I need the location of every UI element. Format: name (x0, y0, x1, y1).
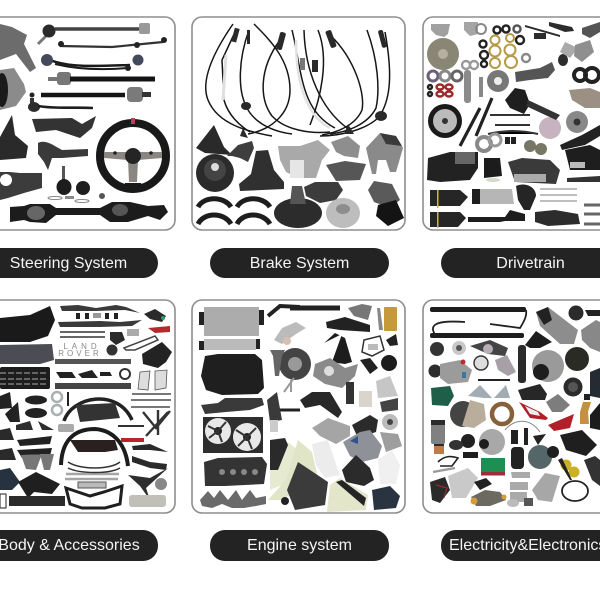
gray box (546, 394, 570, 412)
relay block (380, 398, 398, 412)
small lower parts (507, 499, 519, 507)
arms and rods (488, 115, 538, 134)
pulleys row (430, 340, 508, 356)
tailgate struts (430, 307, 526, 338)
air suspension compressor left (427, 152, 478, 182)
steering rack top (515, 62, 555, 82)
clip row (56, 370, 112, 378)
label: brake system (210, 248, 389, 278)
yellow parts (560, 460, 572, 470)
bumper lower (0, 344, 54, 364)
small gear bottom (281, 497, 289, 505)
ignition black parts (322, 333, 352, 364)
shaft pieces (464, 70, 471, 103)
sender gold (580, 402, 591, 424)
label: steering system: Steering System (10, 255, 127, 272)
cable fittings (231, 28, 387, 138)
coil pack (511, 428, 528, 445)
engine mount (376, 376, 398, 398)
engine guard (0, 468, 20, 490)
red reflector (121, 438, 144, 442)
exhaust arms (284, 378, 294, 392)
rings (52, 392, 62, 402)
radiator (199, 307, 264, 350)
label: engine system (210, 530, 389, 561)
fuse box (518, 384, 547, 400)
yokes and rings top left (431, 22, 520, 37)
steering parts collage (0, 23, 168, 223)
bearing pair (477, 137, 491, 151)
expansion tank black (270, 438, 288, 470)
cluster gauge (564, 378, 582, 396)
blue master cylinder (343, 430, 382, 462)
gear (487, 70, 509, 92)
brake valve block (227, 141, 254, 162)
armature (431, 420, 445, 454)
headlight (129, 495, 166, 507)
hub bearing (539, 117, 561, 139)
brake shoes (198, 199, 270, 224)
AC compressor clutch (450, 400, 486, 428)
silver evap cores (510, 472, 530, 502)
crankshaft (200, 490, 266, 508)
black module right (590, 403, 600, 430)
land rover lettering (58, 342, 102, 358)
oil pan (569, 88, 600, 108)
silver trims (65, 474, 119, 479)
lamp housings (138, 370, 167, 390)
red tail lights (519, 402, 548, 420)
clutch disc (427, 38, 459, 70)
front grille (0, 367, 50, 389)
label: drivetrain: Drivetrain (496, 255, 565, 272)
label: engine system: Engine system (247, 537, 352, 554)
ball joints (48, 166, 105, 202)
air spring (484, 158, 502, 178)
label: steering system (0, 248, 158, 278)
label: body & accessories (0, 530, 158, 561)
brake cables (206, 24, 390, 136)
bearings rows (428, 36, 530, 96)
strut bottom (535, 210, 580, 226)
wheel arch upper (64, 399, 132, 421)
panel: engine system (192, 300, 405, 513)
brackets (21, 454, 54, 470)
window switch (518, 345, 526, 383)
X brackets (143, 410, 170, 436)
starter drive (528, 445, 552, 469)
ABS wire (562, 481, 588, 501)
air compressor right (508, 158, 560, 184)
brake caliper silver (278, 140, 330, 178)
CV axles (460, 98, 492, 146)
ecu board green (431, 386, 454, 406)
land rover lettering: ROVER (58, 349, 102, 358)
electrical parts collage (428, 306, 600, 507)
steering wheel (100, 118, 166, 190)
rubber shifter boot (196, 125, 232, 155)
solenoid black (511, 447, 524, 469)
pump lower left (430, 477, 450, 503)
module right (565, 145, 600, 170)
steering housing (0, 172, 42, 200)
sensor and bracket (474, 356, 488, 370)
label: drivetrain (441, 248, 600, 278)
sensor coil (362, 336, 384, 356)
small spoilers (16, 421, 54, 430)
intake manifold (201, 398, 264, 414)
black bracket (18, 472, 60, 498)
panel: electricity & electronics (423, 300, 600, 513)
clutch plate (566, 111, 588, 133)
spark plug (377, 308, 383, 330)
dark motor (565, 347, 589, 371)
control arm right (128, 468, 168, 500)
long hoses (290, 306, 340, 310)
timing cover (312, 418, 350, 444)
roof rails top (58, 305, 142, 327)
cylinder head (204, 457, 267, 486)
mirror caps (25, 396, 47, 404)
panel: steering system (0, 17, 175, 230)
steering shaft (10, 202, 168, 223)
bearing ring gold (492, 404, 512, 424)
trim strips right (131, 394, 171, 407)
tie rods (28, 23, 167, 112)
bottom reservoirs (287, 462, 328, 510)
top right small parts (106, 309, 172, 368)
transmission oil pan (201, 354, 264, 395)
small module (380, 432, 402, 452)
brake pads (326, 161, 366, 181)
wheel arch lower (61, 429, 128, 466)
panel: body & accessories (0, 300, 175, 513)
radiator fans (203, 417, 263, 453)
front bumper (0, 306, 55, 342)
throttle body (267, 392, 282, 422)
label: electricity & electronics (441, 530, 600, 561)
long trim strips (55, 359, 131, 364)
rods bottom middle (540, 189, 577, 201)
coolant tanks (268, 440, 400, 512)
tie rod ends (32, 116, 96, 170)
mirror covers (468, 385, 510, 398)
brake chamber (368, 181, 404, 226)
ducts (132, 444, 168, 470)
sensor black (525, 331, 552, 348)
panel: brake system (192, 17, 405, 230)
brake caliper large (366, 133, 403, 174)
steering knuckle (0, 24, 36, 72)
hydraulic pump (505, 88, 530, 114)
links upper right (525, 22, 600, 82)
label: brake system: Brake System (250, 255, 349, 272)
synchronizer rings (490, 34, 517, 68)
steering pump silver (581, 320, 600, 352)
mudflaps (0, 392, 20, 422)
fuse holder (560, 430, 597, 456)
compressor (428, 360, 472, 384)
lip pieces (17, 436, 52, 458)
pipes upper middle (268, 306, 300, 316)
dark connectors (474, 478, 492, 490)
alloy wheel (428, 104, 462, 138)
air struts (430, 184, 536, 228)
brake booster (274, 186, 322, 228)
starter motor (536, 307, 578, 344)
cable sensors (438, 457, 458, 466)
panel: drivetrain (423, 17, 600, 230)
timing cover gold (471, 490, 506, 506)
green circuit (481, 458, 505, 473)
gas struts (60, 332, 105, 337)
engine parts collage (199, 304, 402, 512)
body parts collage (0, 305, 172, 508)
relay box right (584, 456, 600, 486)
drivetrain parts collage (427, 22, 600, 228)
speakers (461, 434, 475, 448)
brake disc (326, 198, 360, 228)
label: body & accessories: Body & Accessories (0, 537, 140, 554)
alternator (532, 350, 564, 382)
brake parts collage (196, 24, 404, 228)
oil filter (384, 307, 397, 331)
land rover lettering: LAND (63, 342, 101, 351)
oil pump (313, 358, 358, 388)
brake caliper small (331, 136, 360, 158)
vacuum pump black (381, 355, 397, 371)
brake drum (196, 154, 234, 192)
lower control arm (0, 115, 28, 160)
pressure plate (279, 348, 311, 380)
alternator 2 (479, 429, 505, 455)
pump top (348, 304, 372, 320)
fuel pump stem (270, 350, 285, 376)
spring pack (584, 205, 600, 224)
steering pump (0, 68, 26, 110)
gear shift boot (239, 150, 284, 191)
fascia bottom (66, 486, 122, 508)
